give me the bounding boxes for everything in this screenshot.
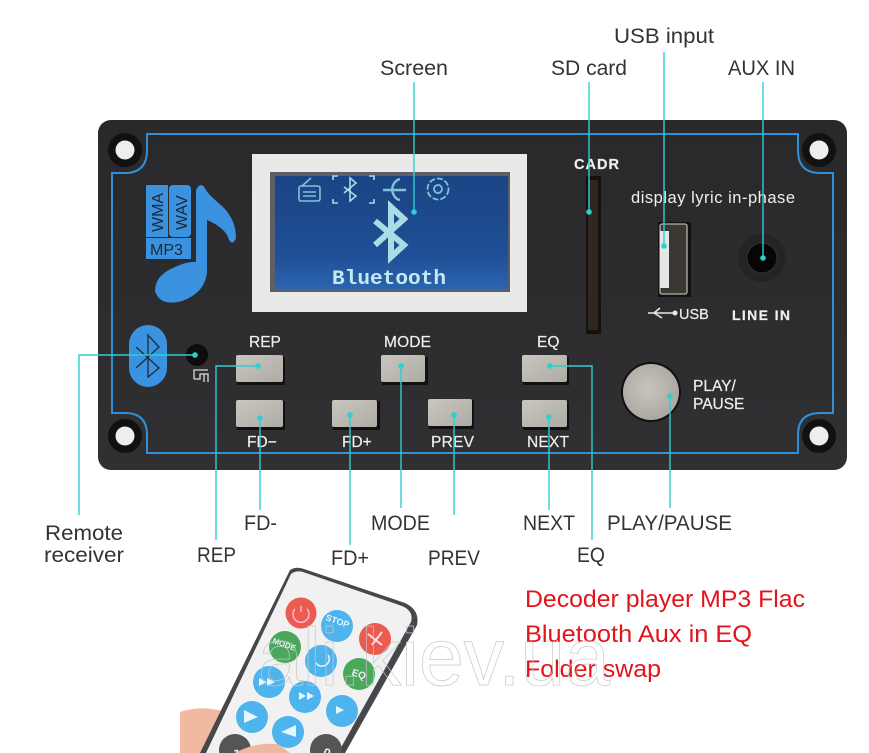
remote buttons	[286, 598, 316, 628]
icon: music note with formats: WMA	[150, 193, 167, 232]
labels: AUX IN	[728, 56, 795, 80]
labels: receiver	[44, 543, 124, 567]
AUX jack	[732, 234, 790, 323]
labels: EQ	[577, 543, 605, 567]
icon: screw bottom left	[108, 419, 142, 453]
button: FD+: FD+	[342, 434, 372, 451]
labels: MODE	[371, 511, 430, 535]
labels: Remote	[45, 521, 123, 545]
labels: USB input	[614, 24, 714, 48]
button: REP: REP	[249, 334, 281, 351]
button: PLAY/PAUSE: PAUSE	[693, 396, 744, 413]
icon: radio	[299, 178, 320, 201]
watermark: ali.kiev.ua	[258, 612, 610, 703]
labels: Screen	[380, 56, 448, 80]
labels: SD card	[551, 56, 627, 80]
button: FD-	[236, 400, 285, 451]
blue border outline	[112, 134, 833, 453]
icon: large bluetooth	[375, 207, 404, 257]
USB port	[648, 222, 709, 323]
icon: gear	[428, 178, 448, 200]
hand: thumb	[235, 744, 290, 753]
button: EQ	[522, 334, 569, 385]
labels: REP	[197, 543, 236, 567]
callout lines	[79, 52, 766, 545]
button: FD+	[332, 400, 380, 451]
button: MODE	[381, 334, 431, 385]
labels: PREV	[428, 546, 481, 570]
button: FD-: FD−	[247, 434, 277, 451]
button: PREV	[428, 399, 475, 451]
remote control: MODE	[271, 636, 298, 653]
red description text: Decoder player MP3 Flac	[525, 586, 805, 613]
button: NEXT	[522, 400, 570, 451]
icon: remote receiver window	[186, 344, 208, 382]
caption: display lyric: display lyric in-phase	[631, 189, 795, 207]
button: MODE: MODE	[384, 334, 431, 351]
button: NEXT: NEXT	[527, 434, 570, 451]
USB port: USB	[679, 307, 709, 323]
remote control: EQ	[350, 667, 367, 683]
button: REP	[236, 334, 285, 385]
remote control: STOP	[324, 612, 351, 630]
icon: bluetooth selected	[333, 176, 374, 203]
red description text: Bluetooth Aux in EQ	[525, 621, 752, 648]
button: PREV: PREV	[431, 434, 475, 451]
button: PLAY/PAUSE	[621, 362, 744, 422]
button: EQ: EQ	[537, 334, 559, 351]
hand: finger	[180, 708, 222, 753]
SD card slot	[574, 157, 620, 334]
red description text: Folder swap	[525, 656, 661, 683]
screen text: Bluetooth	[332, 268, 446, 291]
button: PLAY/PAUSE: PLAY/	[693, 378, 736, 395]
icon: music note with formats	[146, 185, 236, 303]
icon: music note with formats: MP3	[150, 242, 183, 259]
SD card slot: CADR	[574, 157, 620, 173]
icon: usb	[383, 179, 406, 200]
icon: screw top left	[108, 133, 142, 167]
panel: decoder board	[98, 120, 847, 470]
remote control	[200, 568, 418, 753]
AUX jack: LINE IN	[732, 307, 790, 323]
icon: music note with formats: WAV	[174, 195, 191, 230]
labels: FD-	[244, 511, 277, 535]
labels: NEXT	[523, 511, 575, 535]
labels: FD+	[331, 546, 369, 570]
labels	[44, 24, 795, 570]
icon: screw top right	[802, 133, 836, 167]
screen	[252, 154, 527, 312]
labels: PLAY/PAUSE	[607, 511, 732, 535]
icon: screw bottom right	[802, 419, 836, 453]
icon: bluetooth pill	[129, 325, 167, 387]
red description text	[525, 586, 805, 683]
